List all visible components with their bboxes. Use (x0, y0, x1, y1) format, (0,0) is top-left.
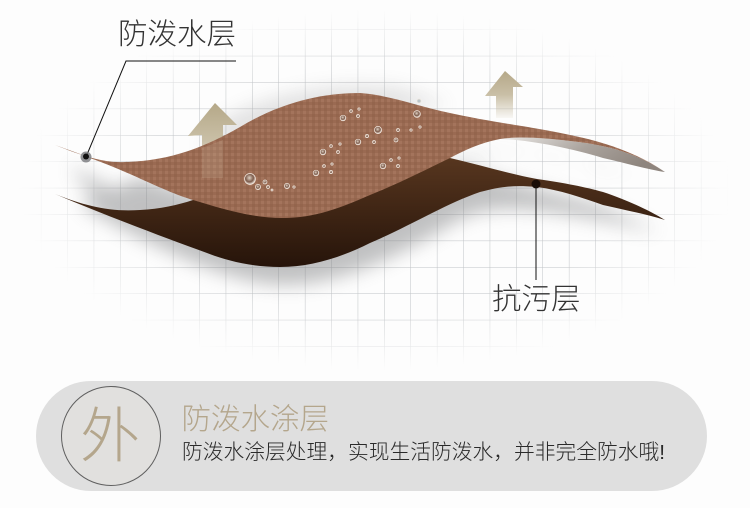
leader line: waterproof layer (80, 61, 236, 162)
label: anti-stain layer: 抗污层 (492, 283, 581, 316)
underside of top fabric (500, 138, 665, 172)
background grid (41, 18, 708, 362)
panel heading: 防泼水涂层 (182, 403, 329, 436)
panel description: 防泼水涂层处理，实现生活防泼水，并非完全防水哦! (182, 441, 665, 464)
info panel (36, 381, 707, 491)
water droplets (244, 99, 421, 191)
leader line: anti-stain layer (532, 180, 540, 280)
arrow overlay on fabric (202, 140, 223, 178)
badge: outer (61, 386, 161, 486)
arrow: left rising (188, 103, 237, 178)
layer shadows (70, 86, 660, 285)
layer: anti-stain dark bottom fabric (55, 158, 665, 267)
badge: outer: 外 (80, 403, 140, 470)
label: waterproof layer: 防泼水层 (118, 18, 236, 51)
layer: waterproof top fabric (55, 93, 665, 218)
arrow: right rising (485, 71, 523, 118)
layered fabric diagram (41, 18, 708, 362)
